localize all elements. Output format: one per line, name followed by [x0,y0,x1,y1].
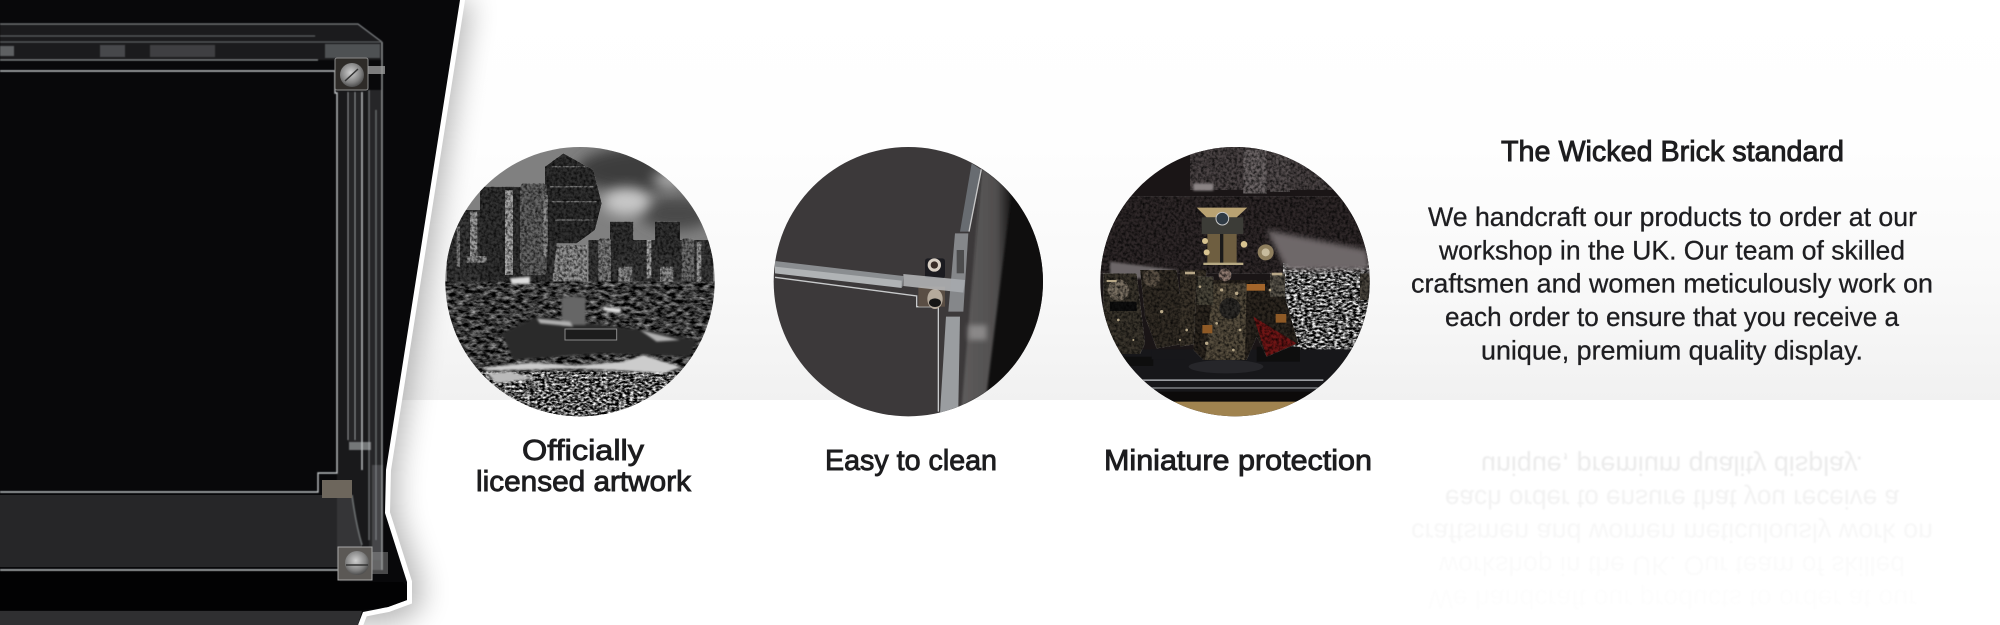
text reflection [1411,451,1933,614]
reflected artwork backdrop [1100,143,1373,420]
black plinth [0,570,407,610]
label: officially licensed artwork: licensed artwork [476,466,692,498]
acrylic top band [0,24,382,60]
background gradient band [0,0,2000,400]
bottom screw block [338,547,388,580]
dark board [770,143,1047,420]
case floor [0,495,362,567]
label: officially licensed artwork: Officially [522,435,645,467]
side panel [964,168,1043,404]
magnet block [322,480,352,498]
bunker plate [502,297,697,360]
text reflection: We handcraft our products to order at our [1428,584,1917,614]
acrylic horizontal bar [775,261,938,412]
wooden stand [1174,402,1296,416]
circle: easy to clean [770,143,1047,420]
corner joint with screw [903,233,968,312]
armour highlights [1107,272,1286,351]
text reflection: workshop in the UK. Our team of skilled [1438,551,1905,581]
text block: standard description: each order to ensure that you receive a [1445,302,1900,332]
text block: standard description: We handcraft our products to order at our [1428,202,1917,232]
sky [443,143,717,287]
text reflection: each order to ensure that you receive a [1445,484,1900,514]
circle: officially licensed artwork [443,143,717,422]
plinth underside [0,611,362,625]
label: easy to clean: Easy to clean [825,445,997,477]
hero figure [1193,269,1298,360]
text block: standard description: unique, premium quality display. [1481,335,1863,365]
base rings [1189,360,1263,373]
label: officially licensed artwork [476,435,692,498]
acrylic vertical top [960,163,982,232]
text reflection: unique, premium quality display. [1481,451,1863,481]
top screw block [335,58,385,90]
text block: standard description: workshop in the UK. Our team of skilled [1438,235,1905,265]
background marines [1103,270,1373,354]
banner and wings [1197,208,1274,265]
acrylic right pillar [0,42,383,570]
panel: acrylic display case photo [0,0,460,625]
shadow of dark photo panel [0,0,472,625]
fire and rubble [480,275,682,416]
heading: the wicked brick standard: The Wicked Brick standard [1501,136,1844,168]
text block: standard description: craftsmen and women meticulously work on [1411,269,1933,299]
label: miniature protection: Miniature protection [1104,445,1372,477]
acrylic vertical bottom [940,317,960,413]
text block: standard description [1411,202,1933,365]
right refinery [588,222,714,282]
left refinery [447,153,602,287]
circle: miniature protection [1100,143,1373,420]
shelf [1118,349,1352,393]
panel outline and black backdrop [0,0,460,625]
ground [443,282,717,422]
text reflection: craftsmen and women meticulously work on [1411,517,1933,547]
